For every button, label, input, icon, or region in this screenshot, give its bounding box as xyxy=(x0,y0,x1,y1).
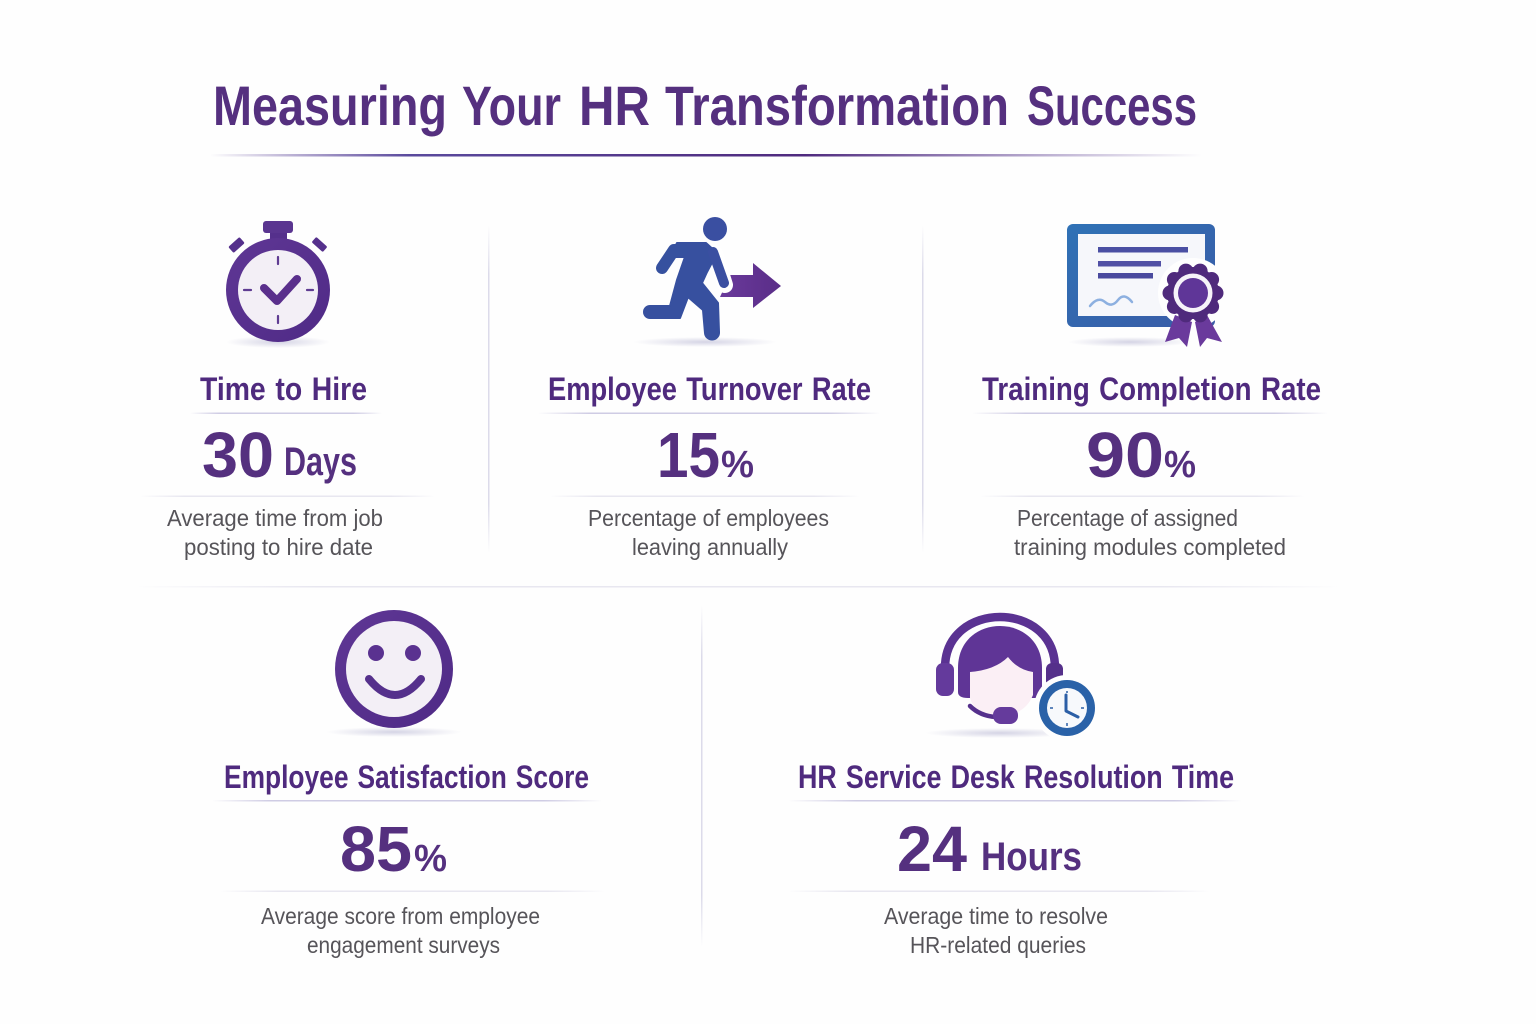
description: leaving annually xyxy=(632,534,788,560)
heading: Training Completion Rate xyxy=(982,371,1321,407)
value: 15 xyxy=(657,419,720,491)
title: HR xyxy=(579,74,650,137)
heading: HR Service Desk Resolution Time xyxy=(798,759,1234,795)
description: posting to hire date xyxy=(184,534,373,560)
description: engagement surveys xyxy=(307,932,500,958)
heading: Time to Hire xyxy=(200,371,367,407)
description: Average time to resolve xyxy=(884,903,1108,929)
panel: time to hire xyxy=(140,221,435,560)
description: training modules completed xyxy=(1014,534,1286,560)
title: Measuring xyxy=(213,74,447,137)
title: Transformation xyxy=(665,74,1009,137)
value xyxy=(202,419,357,491)
icon: headset agent with clock xyxy=(925,617,1100,741)
value: 90 xyxy=(1086,419,1164,491)
icon: smiley face xyxy=(326,610,462,737)
title: Success xyxy=(1027,74,1197,137)
description: Average score from employee xyxy=(261,903,540,929)
panel: service desk resolution xyxy=(788,617,1242,958)
value: % xyxy=(721,444,754,486)
value: Hours xyxy=(981,835,1082,879)
panel: training completion xyxy=(972,224,1328,560)
description: Average time from job xyxy=(167,505,383,531)
description xyxy=(1014,505,1286,560)
description: Percentage of assigned xyxy=(1017,505,1238,531)
description: HR-related queries xyxy=(910,932,1086,958)
value: Days xyxy=(284,440,357,484)
value: % xyxy=(414,838,447,880)
heading: Employee Turnover Rate xyxy=(548,371,871,407)
description xyxy=(167,505,383,560)
heading: Employee Satisfaction Score xyxy=(224,759,589,795)
value xyxy=(897,813,1082,885)
value: 30 xyxy=(202,419,274,491)
value xyxy=(1086,419,1196,491)
value xyxy=(340,813,447,885)
title: Your xyxy=(462,74,561,137)
icon: certificate with rosette xyxy=(1067,224,1228,347)
description xyxy=(884,903,1108,958)
panel: employee turnover xyxy=(538,217,880,560)
title xyxy=(213,74,1197,137)
value: % xyxy=(1164,444,1196,486)
description: Percentage of employees xyxy=(588,505,829,531)
icon: stopwatch xyxy=(226,221,330,348)
description xyxy=(588,505,829,560)
value: 85 xyxy=(340,813,412,885)
icon: running person with arrow xyxy=(633,217,781,347)
panel: employee satisfaction xyxy=(212,610,605,958)
description xyxy=(261,903,540,958)
value: 24 xyxy=(897,813,967,885)
